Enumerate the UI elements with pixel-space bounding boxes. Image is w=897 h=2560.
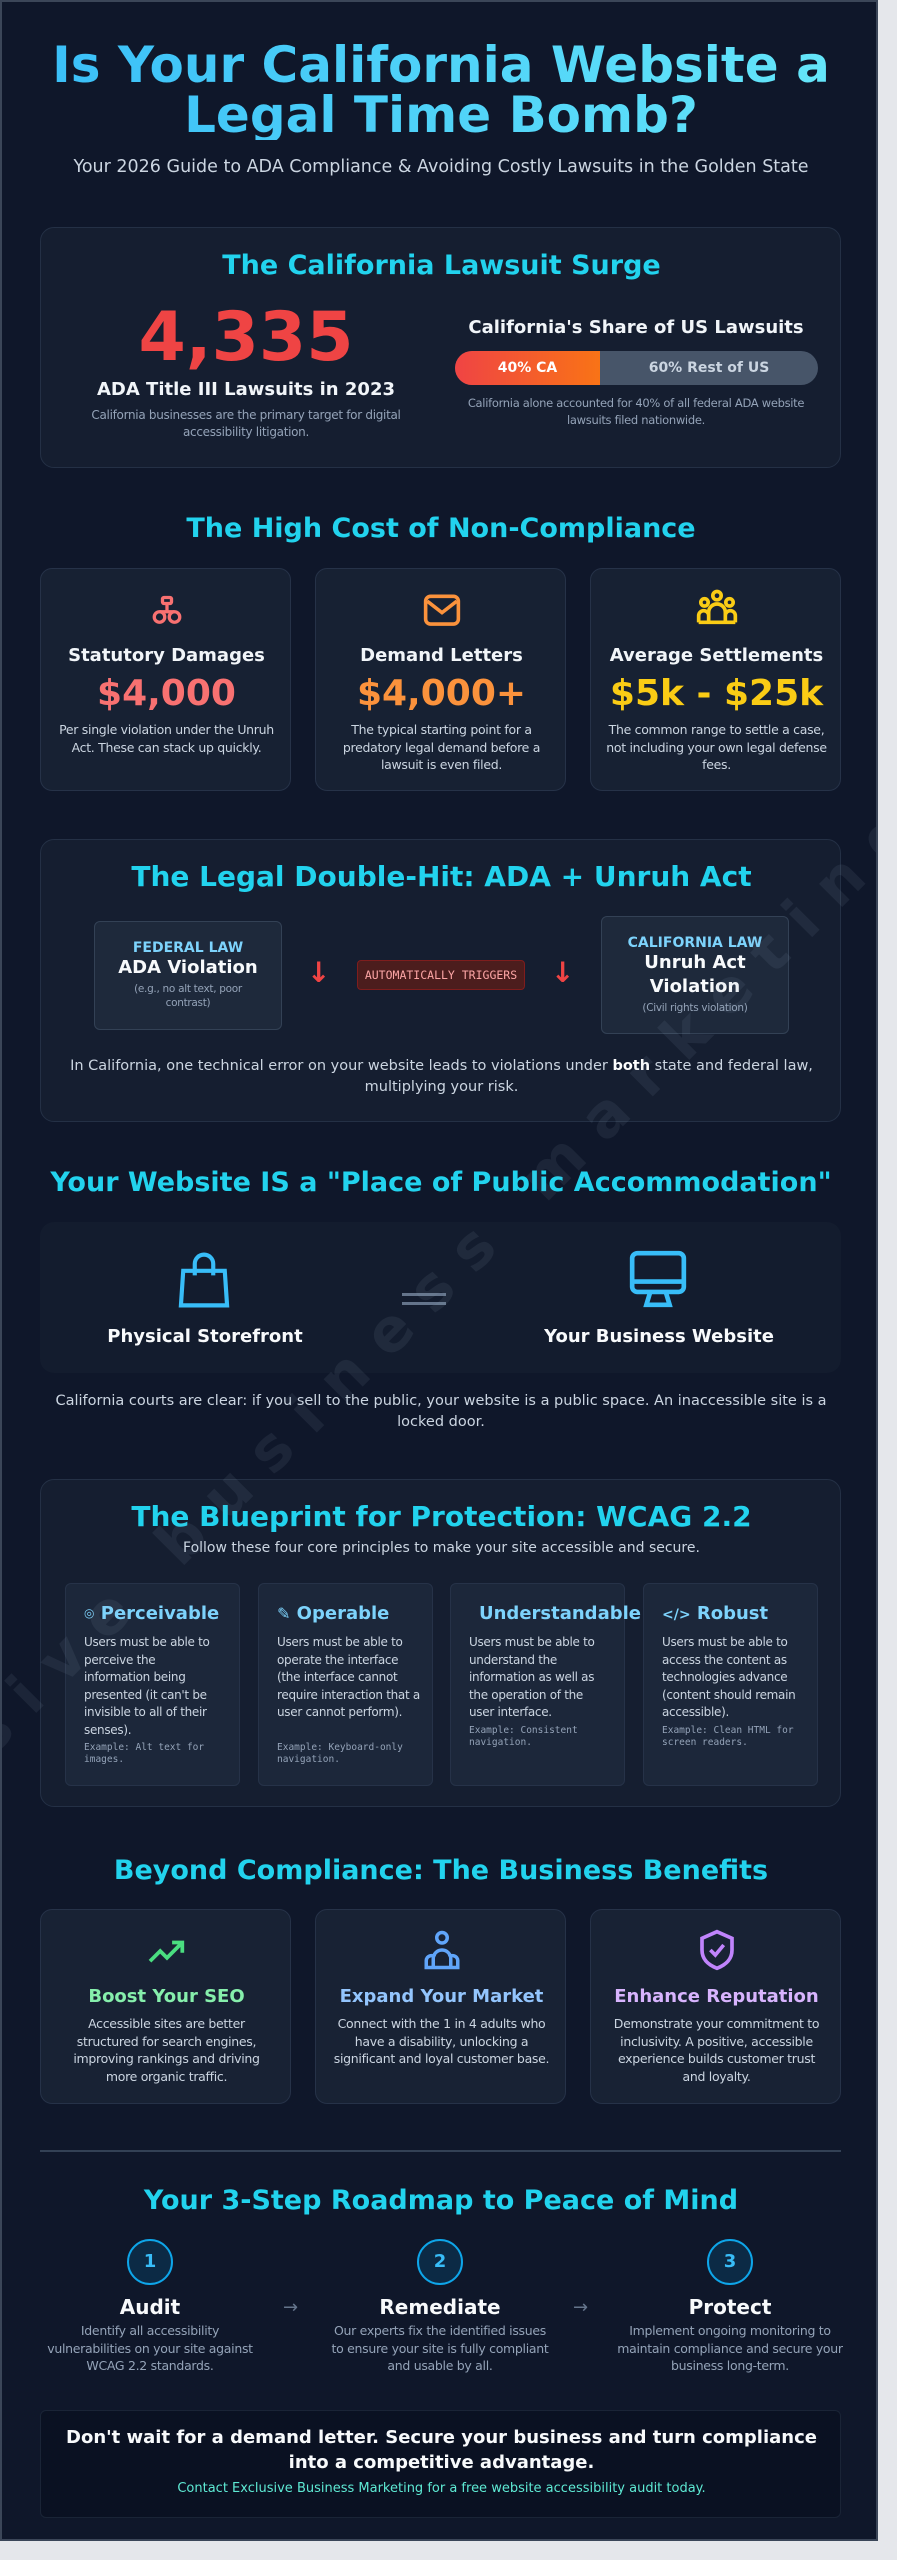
box: california law: (Civil rights violation) xyxy=(642,1002,748,1014)
card: market: significant and loyal customer base. xyxy=(334,2051,549,2066)
stat: 4,335 xyxy=(91,298,401,439)
card: average settlements: Average Settlements xyxy=(610,645,823,666)
badge: automatically triggers xyxy=(357,960,525,990)
step: audit: Identify all accessibility xyxy=(81,2323,219,2338)
heading: The Legal Double-Hit: ADA + Unruh Act xyxy=(131,860,752,893)
card: market: Expand Your Market xyxy=(340,1986,543,2007)
box: california law: Violation xyxy=(650,976,740,997)
panel: lawsuit surge xyxy=(40,227,841,468)
card: SEO: Accessible sites are better structured for search engines, improving rankings and driving more organic traffic. xyxy=(73,2016,260,2084)
card: operable: Users must be able to operate the interface (the interface cannot require interaction that a user cannot perform). xyxy=(277,1635,420,1719)
card: average settlements xyxy=(590,568,841,791)
icon: equals xyxy=(402,1293,446,1305)
icon: group xyxy=(696,590,738,624)
card: statutory damages: $4,000 xyxy=(97,673,236,714)
subtitle: Follow these four core principles to make your site accessible and secure. xyxy=(183,1540,700,1556)
step: audit: Audit xyxy=(120,2295,180,2319)
card: average settlements: $5k - $25k xyxy=(610,673,823,714)
step: protect: 3 xyxy=(724,2251,736,2272)
step: protect: Implement ongoing monitoring to xyxy=(629,2323,831,2338)
arrow: ↓ xyxy=(307,956,330,989)
label: Your Business Website xyxy=(544,1326,774,1347)
panel: storefront vs website xyxy=(40,1222,841,1373)
card: robust xyxy=(643,1583,818,1786)
step: protect: maintain compliance and secure your xyxy=(617,2340,843,2356)
card: statutory damages: Per single violation under the Unruh Act. These can stack up quickly. xyxy=(59,722,274,754)
card: understandable xyxy=(450,1583,625,1786)
icon: monitor xyxy=(630,1250,686,1308)
card: perceivable: ◎ Perceivable xyxy=(84,1603,219,1624)
text: courts: California courts are clear: if you sell to the public, your website is a public space. An inaccessible site is a locked door. xyxy=(55,1393,827,1430)
card: demand letters: Demand Letters xyxy=(360,645,523,666)
callout: CTA xyxy=(40,2410,841,2518)
card: average settlements: not including your own legal defense fees. xyxy=(606,740,827,772)
icon: shield xyxy=(700,1930,734,1970)
step: audit: vulnerabilities on your site against xyxy=(47,2340,253,2356)
card: robust: </> Robust xyxy=(662,1603,768,1624)
title: Legal Time Bomb? xyxy=(184,86,698,144)
arrow: ↓ xyxy=(551,956,574,989)
card: reputation xyxy=(590,1909,841,2104)
panel: WCAG xyxy=(40,1479,841,1807)
card: robust: Users must be able to access the content as technologies advance (content should remain accessible). xyxy=(662,1635,795,1719)
title xyxy=(2,40,880,140)
callout: CTA: Contact Exclusive Business Marketing for a free website accessibility audit today. xyxy=(177,2481,706,2496)
card: understandable: Example: Consistent navigation. xyxy=(469,1725,578,1748)
title: Is Your California Website a xyxy=(52,36,830,94)
badge: automatically triggers: AUTOMATICALLY TRIGGERS xyxy=(365,968,517,982)
icon: scales xyxy=(152,596,182,624)
heading: The Blueprint for Protection: WCAG 2.2 xyxy=(131,1500,752,1533)
step: remediate: 2 xyxy=(434,2251,446,2272)
step: remediate: to ensure your site is fully compliant xyxy=(332,2340,548,2356)
step: remediate: Remediate xyxy=(379,2295,501,2319)
card: demand letters: The typical starting point for a predatory legal demand before a lawsuit is even filed. xyxy=(343,722,540,772)
heading: The California Lawsuit Surge xyxy=(222,250,661,281)
card: perceivable: Users must be able to perceive the information being presented (it can't be invisible to all of their senses). xyxy=(84,1635,210,1737)
card: operable: ✎ Operable xyxy=(277,1603,389,1624)
step: audit: WCAG 2.2 standards. xyxy=(86,2358,214,2373)
box: california law xyxy=(601,916,789,1034)
icon: envelope xyxy=(424,594,460,626)
icon: shopping bag xyxy=(178,1252,230,1308)
stat: 4,335: ADA Title III Lawsuits in 2023 xyxy=(97,379,395,400)
step: audit: 1 xyxy=(144,2251,156,2272)
box: federal law xyxy=(94,921,282,1030)
card: operable: Example: Keyboard-only navigation. xyxy=(277,1742,403,1765)
step: remediate: and usable by all. xyxy=(387,2358,493,2373)
step: audit xyxy=(47,2239,253,2373)
step: remediate: Our experts fix the identified issues xyxy=(334,2323,546,2338)
card: market: Connect with the 1 in 4 adults who xyxy=(338,2016,545,2031)
card: understandable: Users must be able to understand the information as well as the operation of the user interface. xyxy=(469,1635,595,1719)
card: perceivable xyxy=(65,1583,240,1786)
card: demand letters xyxy=(315,568,566,791)
box: california law: Unruh Act xyxy=(644,952,746,973)
card: statutory damages xyxy=(40,568,291,791)
card: market: have a disability, unlocking a xyxy=(355,2034,528,2049)
box: federal law: FEDERAL LAW xyxy=(133,940,243,956)
step: protect: Protect xyxy=(689,2295,771,2319)
label: Physical Storefront xyxy=(107,1326,303,1347)
chart: share bar: California's Share of US Lawsuits xyxy=(468,317,804,338)
box: federal law: (e.g., no alt text, poor contrast) xyxy=(134,983,242,1009)
subtitle: Your 2026 Guide to ADA Compliance & Avoiding Costly Lawsuits in the Golden State xyxy=(73,157,809,177)
chart: share bar: 60% Rest of US xyxy=(649,360,769,376)
card: reputation: Enhance Reputation xyxy=(614,1986,819,2007)
card: perceivable: Example: Alt text for images. xyxy=(84,1742,204,1765)
card: average settlements: The common range to settle a case, xyxy=(609,722,824,737)
arrow: → xyxy=(283,2297,298,2318)
card: statutory damages: Statutory Damages xyxy=(68,645,265,666)
icon: person xyxy=(424,1930,460,1970)
card: market xyxy=(315,1909,566,2104)
card: robust: Example: Clean HTML for screen readers. xyxy=(662,1725,794,1748)
card: understandable: Understandable xyxy=(479,1603,641,1624)
arrow: → xyxy=(573,2297,588,2318)
heading: benefits: Beyond Compliance: The Business Benefits xyxy=(114,1855,768,1886)
callout: CTA: Don't wait for a demand letter. Secure your business and turn compliance into a competitive advantage. xyxy=(66,2427,817,2473)
text: In California, one technical error on your website leads to violations under both state and federal law, multiplying your risk. xyxy=(70,1058,813,1095)
box: california law: CALIFORNIA LAW xyxy=(628,935,762,951)
card: operable xyxy=(258,1583,433,1786)
chart: share bar: California alone accounted for 40% of all federal ADA website lawsuits filed nationwide. xyxy=(468,396,804,427)
heading: roadmap: Your 3-Step Roadmap to Peace of Mind xyxy=(144,2185,738,2216)
step: remediate xyxy=(332,2239,548,2373)
card: reputation: Demonstrate your commitment to inclusivity. A positive, accessible experience builds customer trust and loyalty. xyxy=(614,2016,819,2084)
step: protect: business long-term. xyxy=(671,2358,789,2373)
card: SEO: Boost Your SEO xyxy=(88,1986,245,2007)
card: SEO xyxy=(40,1909,291,2104)
step: protect xyxy=(617,2239,843,2373)
chart: share bar xyxy=(455,317,818,427)
heading: high cost: The High Cost of Non-Compliance xyxy=(186,513,696,544)
icon: trend xyxy=(148,1940,184,1962)
card: demand letters: $4,000+ xyxy=(357,673,526,714)
box: federal law: ADA Violation xyxy=(118,957,258,978)
stat: 4,335: 4,335 xyxy=(138,298,354,377)
chart: share bar: 40% CA xyxy=(498,360,557,376)
stat: 4,335: California businesses are the primary target for digital accessibility litigation. xyxy=(91,408,401,439)
heading: public accommodation: Your Website IS a "Place of Public Accommodation" xyxy=(50,1167,832,1198)
panel: legal double-hit xyxy=(40,839,841,1122)
